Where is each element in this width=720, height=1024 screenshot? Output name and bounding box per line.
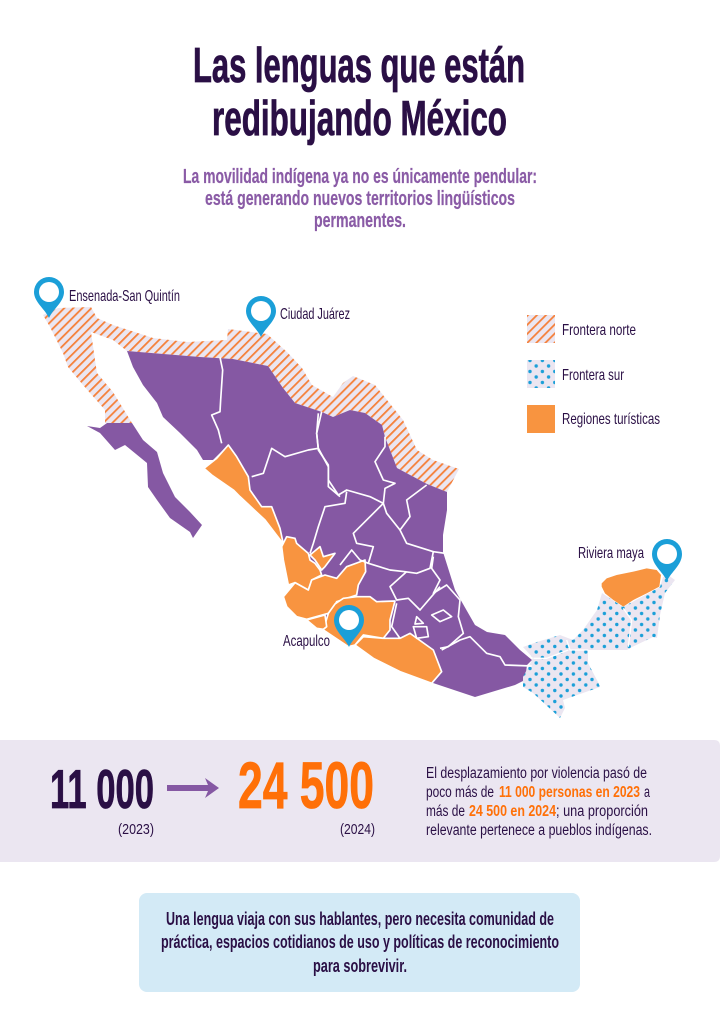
legend item: Frontera sur: Frontera sur bbox=[562, 367, 624, 384]
subtitle: La movilidad indígena ya no es únicamente pendular: bbox=[183, 166, 537, 188]
state borders, southeast bbox=[533, 608, 632, 658]
arrow bbox=[167, 778, 219, 798]
pin: Riviera maya bbox=[652, 539, 682, 581]
pin: Ensenada-San Quintín bbox=[34, 277, 64, 318]
callout: Una lengua viaja con sus hablantes, pero necesita comunidad de bbox=[166, 909, 554, 929]
text block: displacement description bbox=[426, 765, 652, 839]
region: frontera sur bbox=[523, 575, 675, 718]
text block: displacement description: 11 000 personas en 2023 bbox=[499, 784, 640, 801]
regions: turísticas bbox=[204, 445, 442, 683]
text block: displacement description: relevante pertenece a pueblos indígenas. bbox=[426, 822, 652, 839]
legend bbox=[527, 315, 660, 433]
subtitle: permanentes. bbox=[314, 210, 406, 232]
text block: displacement description: más de bbox=[426, 803, 465, 820]
pin: Ciudad Juárez bbox=[246, 296, 276, 337]
label: Ensenada-San Quintín: Ensenada-San Quintín bbox=[69, 288, 180, 305]
legend item: Frontera norte: Frontera norte bbox=[562, 322, 636, 339]
legend item: Regiones turísticas: Regiones turísticas bbox=[562, 411, 660, 428]
title: Las lenguas que están bbox=[193, 39, 525, 93]
map of Mexico bbox=[34, 277, 682, 718]
region: mainland states bbox=[127, 351, 532, 697]
text block: displacement description: El desplazamiento por violencia pasó de bbox=[426, 765, 647, 782]
title bbox=[193, 39, 525, 146]
subtitle: está generando nuevos territorios lingüísticos bbox=[205, 188, 515, 210]
text block: displacement description: a bbox=[644, 784, 650, 801]
region: frontera norte bbox=[43, 307, 459, 492]
text block: displacement description: ; una proporción bbox=[556, 803, 648, 820]
label: Acapulco: Acapulco bbox=[283, 633, 330, 650]
label: Riviera maya: Riviera maya bbox=[578, 545, 644, 562]
year: 2024: (2024) bbox=[340, 821, 375, 838]
panel: statistics band bbox=[0, 740, 720, 862]
title: redibujando México bbox=[212, 92, 507, 146]
region: Baja California Sur bbox=[87, 423, 202, 538]
callout bbox=[139, 893, 580, 992]
text block: displacement description: poco más de bbox=[426, 784, 494, 801]
number: 11 000: 11 000 bbox=[50, 758, 154, 820]
subtitle bbox=[183, 166, 537, 232]
region: Riviera maya bbox=[602, 568, 661, 607]
label: Ciudad Juárez: Ciudad Juárez bbox=[280, 306, 350, 323]
callout: para sobrevivir. bbox=[313, 956, 407, 976]
text block: displacement description: 24 500 en 2024 bbox=[469, 803, 556, 820]
state borders, centre and south bbox=[310, 413, 532, 666]
state borders bbox=[212, 357, 340, 497]
number: 24 500: 24 500 bbox=[238, 748, 374, 822]
callout: práctica, espacios cotidianos de uso y políticas de reconocimiento bbox=[161, 932, 559, 952]
pin: Acapulco bbox=[334, 605, 364, 647]
year: 2023: (2023) bbox=[118, 821, 154, 838]
